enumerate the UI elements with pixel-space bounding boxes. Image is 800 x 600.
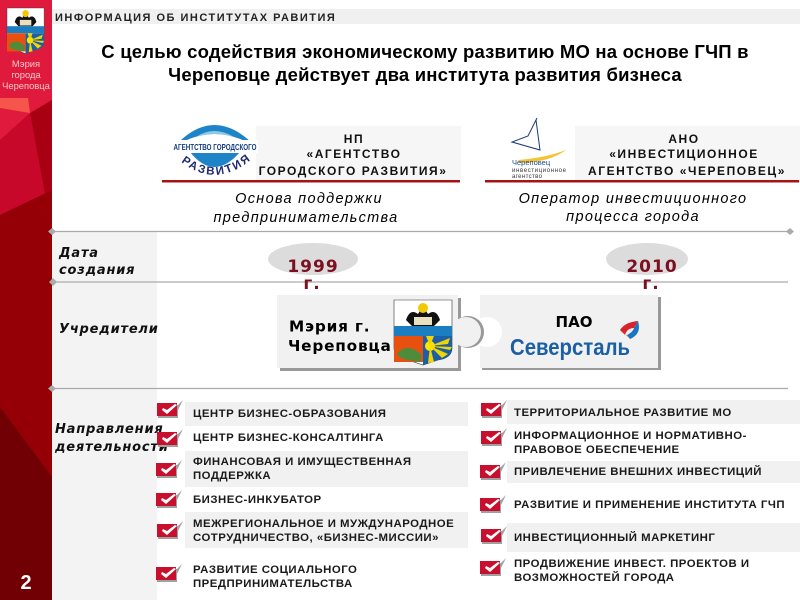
panel: organisation 1 heading [162,126,461,182]
sidebar city label: Мэрия [12,58,40,69]
panel: organisation 2 heading: АНО [668,132,700,146]
panel: right directions list: ИНФОРМАЦИОННОЕ И НОРМАТИВНО- [514,430,747,442]
panel: left directions list: ПОДДЕРЖКА [193,470,271,482]
panel: organisation 2 heading: АГЕНТСТВО «ЧЕРЕПОВЕЦ» [588,164,786,178]
subtitle: organisation 1 role: предпринимательства [214,210,398,226]
founder card: city hall [277,295,484,371]
row label: founders: Учредители [59,322,159,337]
panel: left directions list [156,400,468,590]
icon: agency logo: АГЕНТСТВО ГОРОДСКОГО [174,143,257,152]
icon: investment agency logo: Череповец [512,158,551,167]
panel: organisation 1 heading: «АГЕНТСТВО [306,147,402,161]
panel: organisation 2 heading [485,126,800,182]
icon: investment agency logo: инвестиционное [512,168,567,174]
subtitle: organisation 1 role: Основа поддержки [235,191,383,207]
row label: date: создания [59,263,135,278]
icon: agency logo: РАЗВИТИЯ [182,154,250,175]
icon: coat of arms [394,300,452,365]
sidebar city label: города [11,69,41,80]
title: С целью содействия экономическому развитию МО на основе ГЧП в [101,41,749,62]
panel: left directions list: МЕЖРЕГИОНАЛЬНОЕ И МУЖДУНАРОДНОЕ [193,518,454,530]
subtitle: organisation 2 role: процесса города [566,209,700,225]
icon: agency logo [174,125,258,175]
panel: left directions list: ЦЕНТР БИЗНЕС-ОБРАЗОВАНИЯ [193,408,386,420]
header bar: ИНФОРМАЦИЯ ОБ ИНСТИТУТАХ РАВИТИЯ [55,12,336,24]
founder card: city hall: Мэрия г. [289,318,370,336]
panel: left directions list: ПРЕДПРИНИМАТЕЛЬСТВА [193,578,353,590]
panel: left directions list: СОТРУДНИЧЕСТВО, «БИЗНЕС-МИССИИ» [193,532,439,544]
icon: investment agency logo: агентство [512,174,543,180]
panel: organisation 1 heading: НП [344,132,364,146]
year badge 2010: 2010 [626,257,678,277]
panel: left directions list: ЦЕНТР БИЗНЕС-КОНСАЛТИНГА [193,432,384,444]
sidebar [0,0,52,600]
panel: right directions list: ТЕРРИТОРИАЛЬНОЕ РАЗВИТИЕ МО [514,407,732,419]
year badge 2010: г. [642,274,660,294]
founder card: Severstal: Северсталь [510,334,630,360]
panel: left directions list: РАЗВИТИЕ СОЦИАЛЬНОГО [193,564,357,576]
sidebar city label: Череповца [2,80,51,91]
icon: investment agency logo [512,118,567,180]
row label: directions: деятельности [54,440,169,455]
page number: 2 [20,572,32,594]
row label: date: Дата [58,246,99,261]
year badge 1999 [268,243,358,294]
icon: city coat of arms [7,8,44,54]
panel: organisation 1 heading: ГОРОДСКОГО РАЗВИТИЯ» [259,164,447,178]
year badge 2010 [606,243,688,294]
panel: right directions list: ИНВЕСТИЦИОННЫЙ МАРКЕТИНГ [514,531,715,544]
panel: left directions list: БИЗНЕС-ИНКУБАТОР [193,494,322,506]
panel: right directions list [480,400,800,584]
panel: right directions list: ВОЗМОЖНОСТЕЙ ГОРОДА [514,571,675,584]
subtitle: organisation 2 role: Оператор инвестиционного [519,191,747,207]
year badge 1999: 1999 [287,257,339,277]
panel: organisation 2 heading: «ИНВЕСТИЦИОННОЕ [609,147,759,161]
header bar [52,9,800,24]
title: Череповце действует два института развития бизнеса [168,64,682,85]
panel: row label column [52,232,157,600]
row label: directions: Направления [55,422,164,437]
icon: Severstal mark [620,321,639,339]
founder card: Severstal: ПАО [556,313,592,331]
founder card: Severstal [472,295,661,370]
panel: right directions list: ПРОДВИЖЕНИЕ ИНВЕСТ. ПРОЕКТОВ И [514,558,750,570]
panel: right directions list: РАЗВИТИЕ И ПРИМЕНЕНИЕ ИНСТИТУТА ГЧП [514,499,785,511]
row dividers [48,228,794,392]
panel: left directions list: ФИНАНСОВАЯ И ИМУЩЕСТВЕННАЯ [193,456,412,468]
panel: right directions list: ПРАВОВОЕ ОБЕСПЕЧЕНИЕ [514,444,680,456]
panel: right directions list: ПРИВЛЕЧЕНИЕ ВНЕШНИХ ИНВЕСТИЦИЙ [514,465,762,478]
founder card: city hall: Череповца [288,337,392,355]
year badge 1999: г. [303,274,321,294]
